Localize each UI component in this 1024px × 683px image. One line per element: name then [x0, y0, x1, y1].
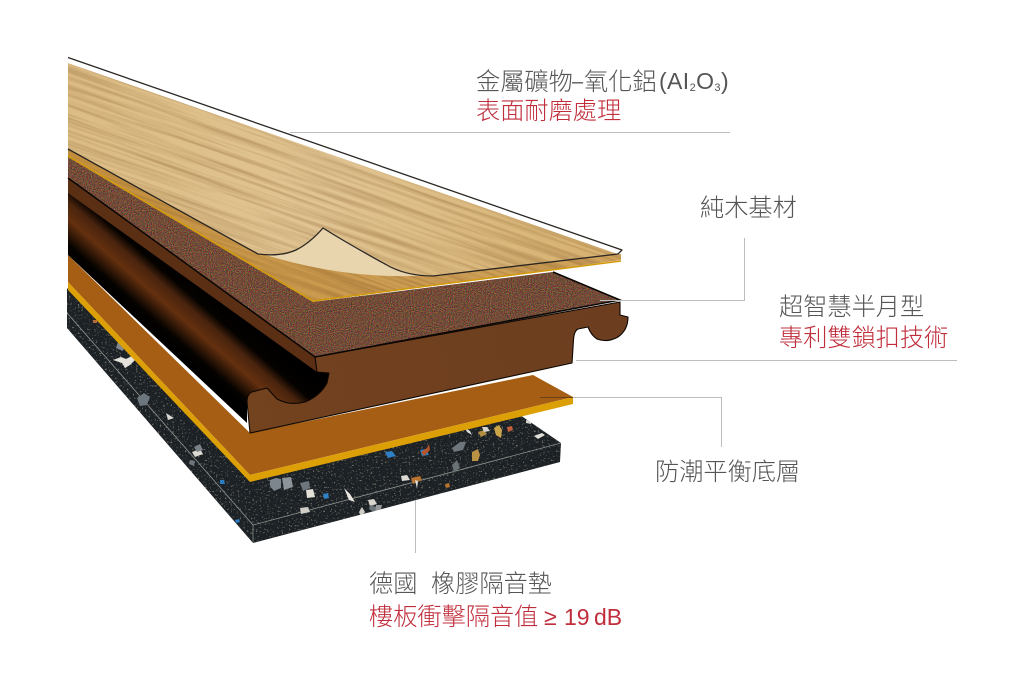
label: aluminium oxide surface treatment: (AI	[659, 68, 690, 94]
white wear layer edge	[68, 59, 622, 254]
layer: solid wood core with click-lock profile	[68, 178, 628, 433]
layer: cork-speckled core top	[60, 155, 630, 365]
label: solid wood core: 純木基材	[700, 195, 797, 222]
label: aluminium oxide surface treatment: –	[572, 71, 584, 93]
label: German rubber underlay: 橡膠隔音墊	[431, 571, 552, 598]
label: German rubber underlay: ≥	[544, 604, 557, 630]
label: aluminium oxide surface treatment: 氧化鋁	[584, 69, 657, 96]
label: German rubber underlay	[369, 571, 622, 631]
label: German rubber underlay: 樓板衝擊隔音值	[369, 604, 538, 631]
label: German rubber underlay: dB	[594, 604, 622, 630]
label: aluminium oxide surface treatment: 金屬礦物	[476, 69, 573, 96]
curled-up underside	[262, 228, 433, 276]
label: aluminium oxide surface treatment	[476, 68, 729, 125]
label: German rubber underlay: 德國	[369, 571, 417, 598]
layer: rubber sound-insulation pad	[60, 280, 570, 550]
top wood face	[68, 63, 618, 276]
upper lip of core	[68, 178, 317, 372]
label: click-lock technology: 超智慧半月型	[779, 294, 924, 321]
leader lines	[290, 132, 957, 553]
label: aluminium oxide surface treatment: 3	[714, 82, 721, 94]
front face of core	[247, 302, 628, 433]
groove side of core	[68, 178, 329, 423]
label: click-lock technology	[779, 294, 948, 352]
layer: moisture-proof balance backing	[68, 255, 573, 482]
label: German rubber underlay: 19	[564, 604, 590, 630]
layer: wood veneer	[68, 56, 623, 302]
label: aluminium oxide surface treatment: 2	[690, 82, 696, 94]
lower veneer edge	[68, 149, 621, 302]
label: aluminium oxide surface treatment: 表面耐磨處理	[476, 98, 621, 125]
label: aluminium oxide surface treatment: O	[696, 68, 714, 94]
label: moisture-proof backing: 防潮平衡底層	[655, 459, 800, 486]
label: aluminium oxide surface treatment: )	[721, 68, 729, 94]
label: click-lock technology: 專利雙鎖扣技術	[779, 325, 948, 352]
